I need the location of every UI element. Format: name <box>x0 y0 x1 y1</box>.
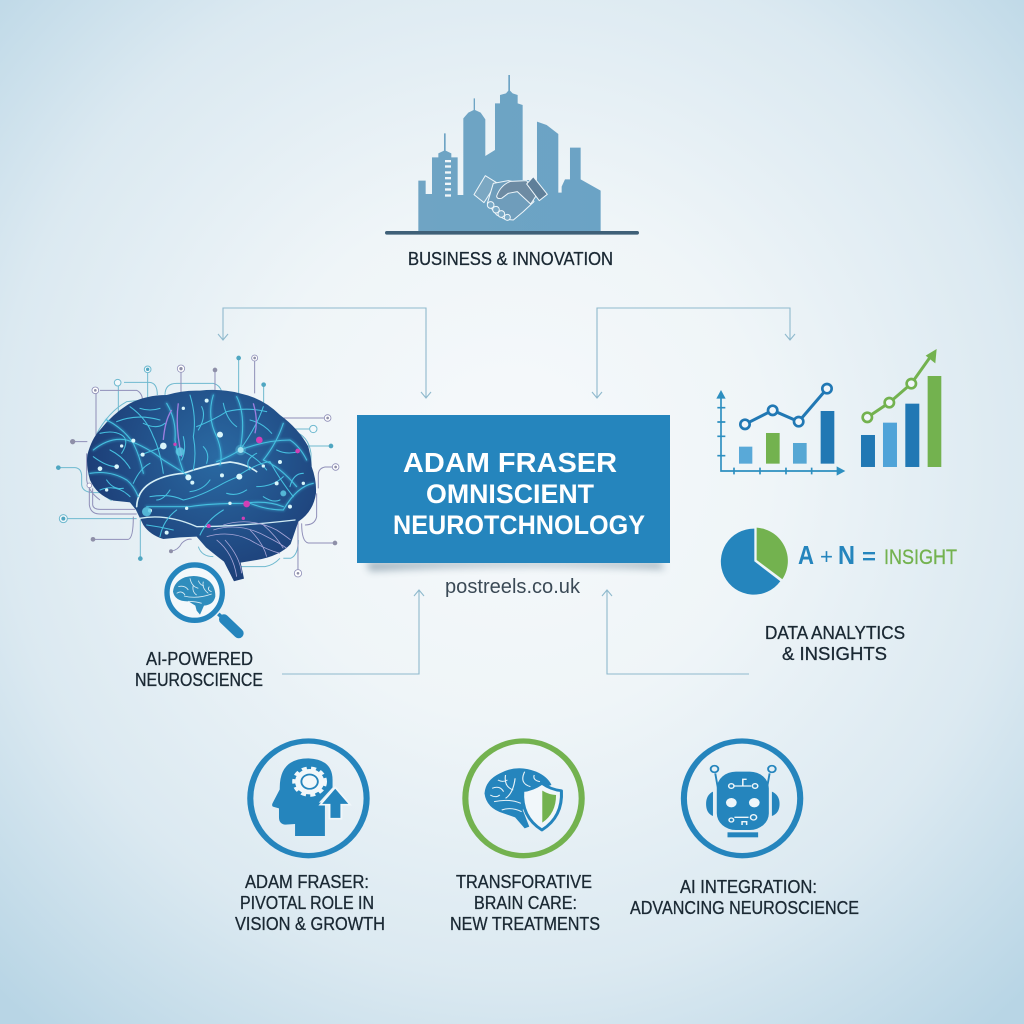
icon: head with gear and arrow <box>250 741 367 856</box>
label: AI integration: ADVANCING NEUROSCIENCE <box>630 898 859 918</box>
label: AI-powered neuroscience <box>135 649 263 690</box>
chart: line and bar chart <box>716 384 845 476</box>
equation: A + N = insight <box>798 540 957 570</box>
label: AI integration <box>630 877 859 918</box>
label: data analytics and insights <box>765 623 905 664</box>
illustration: neural brain <box>87 390 316 581</box>
label: Adam Fraser pivotal role <box>235 872 385 934</box>
panel: data analytics and insights <box>716 349 957 664</box>
title text: NEUROTCHNOLOGY <box>393 510 645 540</box>
chart: pie <box>721 528 788 595</box>
arrow: business to analytics <box>592 308 795 398</box>
circuit lines around brain <box>56 355 339 577</box>
label: transformative brain care: NEW TREATMENTS <box>450 914 600 934</box>
icon: magnifying glass with brain <box>167 565 239 633</box>
arrow: analytics to centre <box>602 590 749 674</box>
panel: Adam Fraser pivotal role <box>235 741 385 934</box>
label: AI-powered neuroscience: AI-POWERED <box>146 649 253 669</box>
label: data analytics and insights: & INSIGHTS <box>782 644 887 664</box>
panel: transformative brain care <box>450 741 600 934</box>
heading: business and innovation: BUSINESS & INNOVATION <box>408 249 613 269</box>
website: postreels.co.uk <box>445 576 581 598</box>
label: transformative brain care: TRANSFORATIVE <box>456 872 592 892</box>
icon: handshake <box>474 176 547 220</box>
arrow: business to brain <box>218 308 431 398</box>
panel: AI-powered neuroscience <box>56 355 339 690</box>
label: Adam Fraser pivotal role: VISION & GROWTH <box>235 914 385 934</box>
title text <box>393 447 645 540</box>
title text: OMNISCIENT <box>426 479 594 509</box>
ground line <box>385 231 639 235</box>
chart: growth bars with arrow <box>861 349 941 467</box>
label: transformative brain care: BRAIN CARE: <box>474 893 577 913</box>
label: Adam Fraser pivotal role: ADAM FRASER: <box>245 872 369 892</box>
brain glow <box>90 395 313 510</box>
icon: robot head <box>684 741 800 856</box>
icon: city skyline <box>418 75 601 231</box>
title box <box>357 415 670 563</box>
arrow: neuroscience to centre <box>282 590 424 674</box>
equation: A + N = insight: A <box>798 540 814 570</box>
title text: ADAM FRASER <box>403 447 617 478</box>
equation: A + N = insight: = <box>862 544 876 569</box>
icon: brain with shield <box>465 741 582 856</box>
label: AI-powered neuroscience: NEUROSCIENCE <box>135 670 263 690</box>
equation: A + N = insight: + <box>820 544 833 569</box>
brain folds and neural pathways <box>90 395 313 537</box>
label: AI integration: AI INTEGRATION: <box>680 877 817 897</box>
panel: central title <box>357 415 670 598</box>
title box shadow <box>366 562 665 571</box>
label: transformative brain care <box>450 872 600 934</box>
panel: business and innovation <box>385 75 639 269</box>
label: data analytics and insights: DATA ANALYTICS <box>765 623 905 643</box>
label: Adam Fraser pivotal role: PIVOTAL ROLE IN <box>240 893 374 913</box>
equation: A + N = insight: N <box>838 540 855 570</box>
equation: A + N = insight: INSIGHT <box>884 546 957 569</box>
panel: AI integration <box>630 741 859 918</box>
